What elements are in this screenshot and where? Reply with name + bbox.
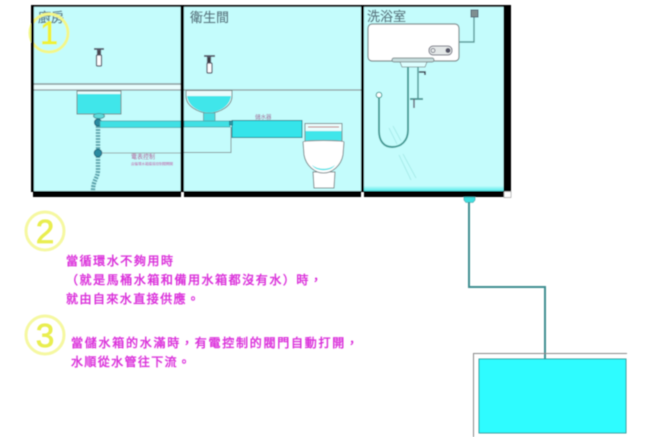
icon: kitchen faucet: [94, 49, 104, 66]
toilet: [303, 124, 344, 188]
circulation pipe: [100, 121, 181, 128]
wash basin: [186, 90, 232, 121]
panel: shower room: [363, 6, 504, 192]
counter lines: [33, 84, 181, 90]
text block: step 3: 水順從水管往下流。: [71, 354, 190, 369]
step 1 marker: [30, 14, 68, 52]
kitchen title: 廚房: [38, 10, 64, 25]
storage tank: [230, 120, 302, 138]
label: electric control: 電表控制: [131, 153, 155, 161]
bathroom title: 衛生間: [190, 10, 229, 25]
circulation pipe: [184, 121, 230, 127]
icon: mixing valve: [410, 67, 425, 108]
icon: shower hose: [376, 67, 408, 147]
step 1 marker: 1: [40, 15, 58, 51]
label: storage tank: 儲水器: [255, 113, 272, 121]
kitchen sink: [77, 91, 121, 118]
icon: water heater: [368, 10, 478, 67]
text block: step 2: 當循環水不夠用時: [66, 254, 173, 268]
step 2 marker: 2: [36, 213, 54, 250]
step 3 marker: [26, 316, 64, 354]
control wire: [102, 152, 181, 154]
icon: bathroom faucet: [204, 56, 215, 73]
drain pipe to tank: [469, 202, 545, 359]
text block: step 2: （就是馬桶水箱和備用水箱都沒有水）時，: [66, 272, 322, 287]
label: control caption: 由循環水箱連接控制閥開關: [131, 161, 173, 166]
black frame: [31, 5, 511, 198]
drain fitting: [464, 197, 475, 202]
panel: bathroom: [184, 6, 361, 192]
drain hose with valves: [93, 119, 102, 191]
text block: step 3: 當儲水箱的水滿時，有電控制的閥門自動打開，: [71, 335, 358, 350]
text block: step 3: [71, 335, 358, 369]
faint water spray: [389, 126, 416, 180]
control wire box: [184, 127, 231, 152]
step 2 marker: [26, 212, 64, 250]
step 3 marker: 3: [36, 317, 54, 354]
shower room title: 洗浴室: [367, 9, 406, 24]
text block: step 2: [66, 254, 322, 306]
panel: kitchen: [30, 6, 181, 192]
text block: step 2: 就由自來水直接供應。: [66, 291, 199, 306]
panel: lower storage tank: [474, 354, 627, 437]
